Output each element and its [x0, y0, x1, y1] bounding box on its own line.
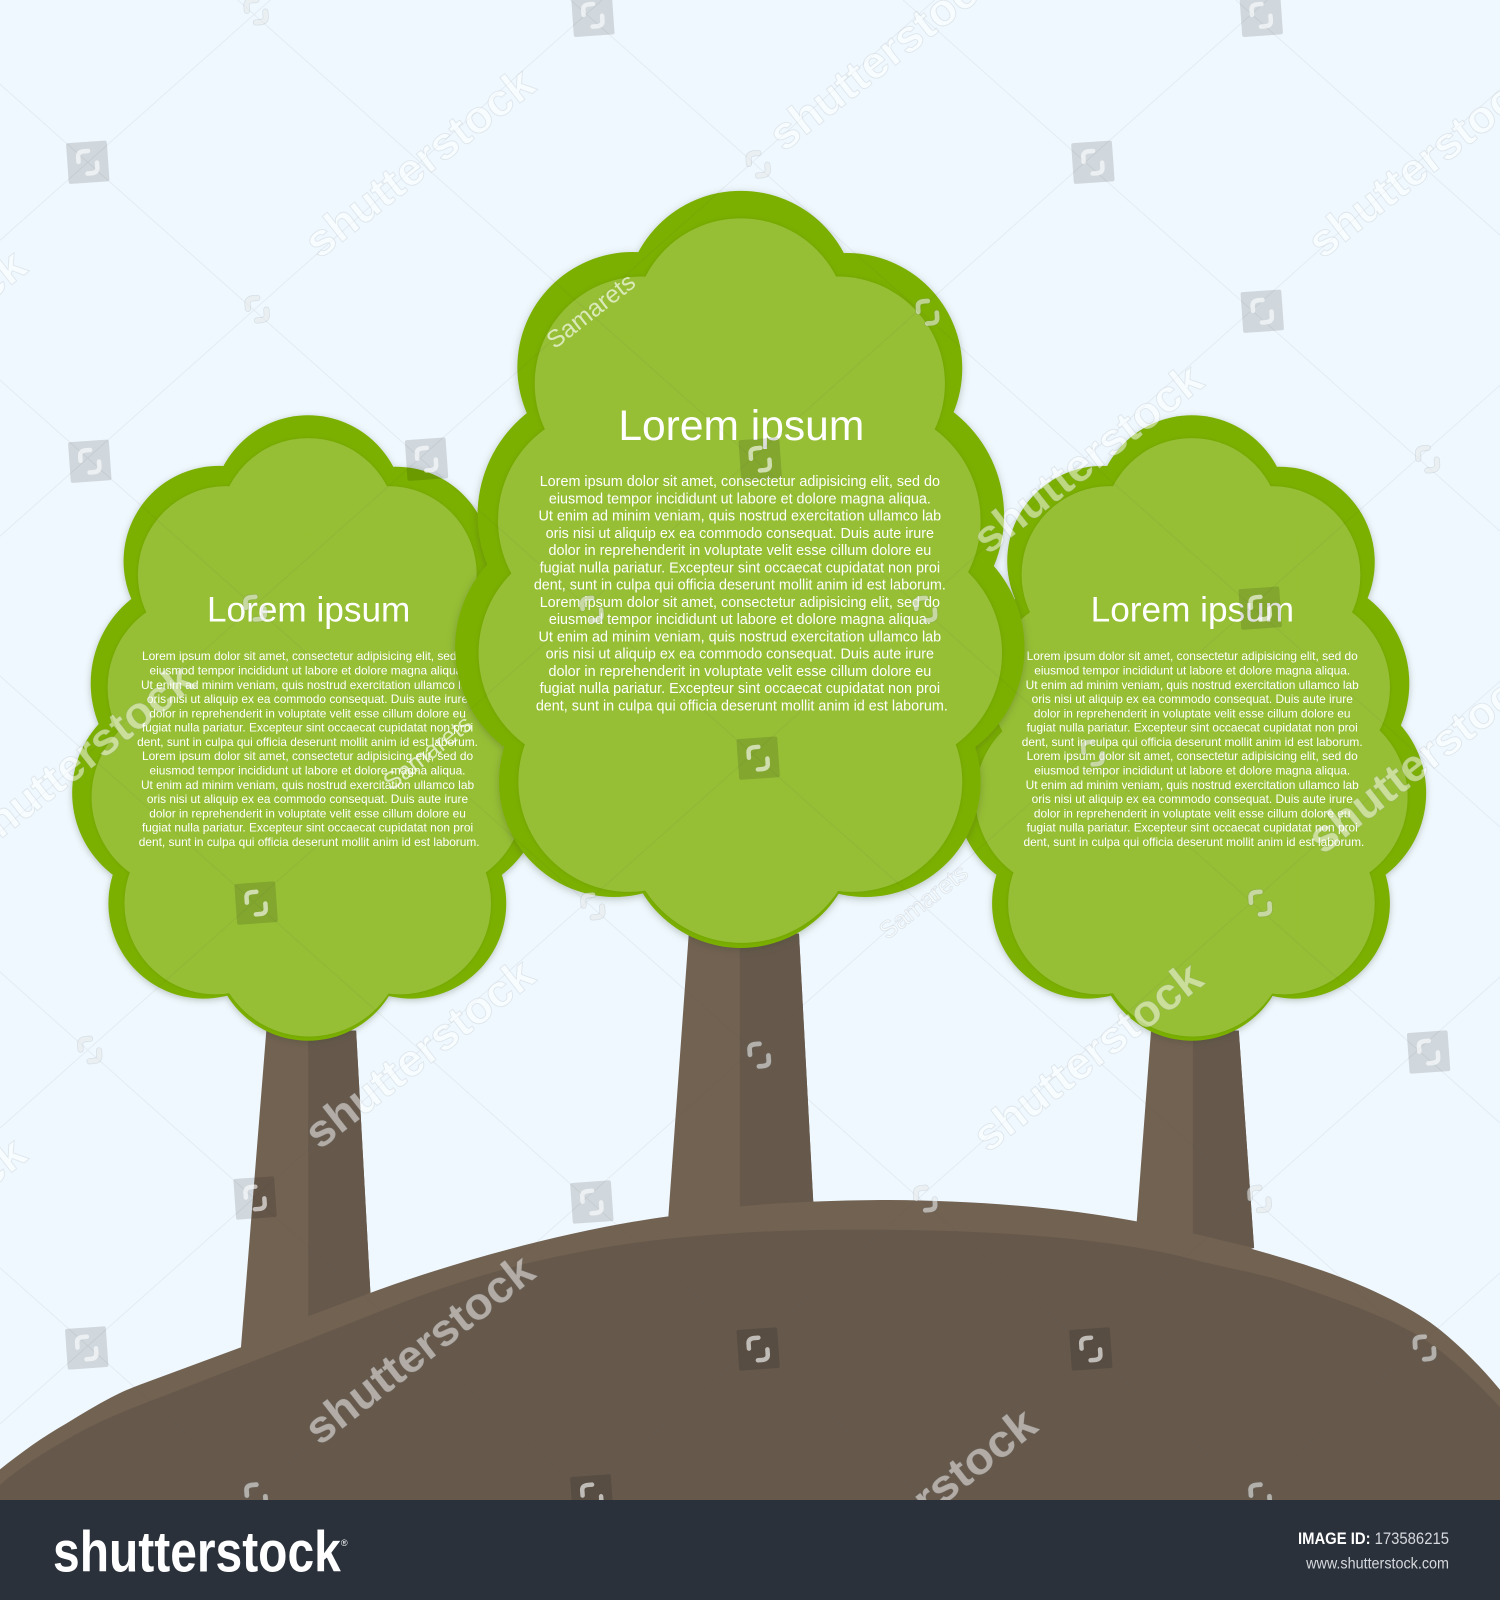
- left tree body text: oris nisi ut aliquip ex ea commodo consequat. Duis aute irure: [147, 792, 469, 806]
- footer registered mark: ®: [341, 1538, 348, 1548]
- right tree body text: dolor in reprehenderit in voluptate velit esse cillum dolore eu: [1034, 706, 1351, 720]
- right tree body text: Lorem ipsum dolor sit amet, consectetur adipisicing elit, sed do: [1027, 649, 1358, 663]
- centre tree body text: Ut enim ad minim veniam, quis nostrud exercitation ullamco lab: [538, 629, 941, 645]
- centre tree trunk: [668, 934, 813, 1224]
- right tree trunk: [1137, 1031, 1254, 1265]
- footer url: www.shutterstock.com: [1305, 1555, 1449, 1572]
- left tree body text: dent, sunt in culpa qui officia deserunt mollit anim id est laborum.: [139, 835, 480, 849]
- footer image id: IMAGE ID: 173586215: [1298, 1530, 1449, 1548]
- watermark: Samarets credit text: Samarets: [874, 859, 974, 945]
- right tree body text: dent, sunt in culpa qui officia deserunt mollit anim id est laborum.: [1023, 835, 1364, 849]
- centre tree body text: dent, sunt in culpa qui officia deserunt mollit anim id est laborum.: [534, 578, 946, 594]
- left tree body text: dolor in reprehenderit in voluptate velit esse cillum dolore eu: [149, 706, 466, 720]
- right tree crown: [956, 415, 1426, 1041]
- left tree body text: oris nisi ut aliquip ex ea commodo consequat. Duis aute irure: [147, 692, 469, 706]
- left tree body text: fugiat nulla pariatur. Excepteur sint occaecat cupidatat non proi: [142, 821, 473, 835]
- footer logo: shutterstock: [53, 1520, 341, 1584]
- left tree body text: Lorem ipsum dolor sit amet, consectetur adipisicing elit, sed do: [142, 649, 473, 663]
- right tree body text: oris nisi ut aliquip ex ea commodo consequat. Duis aute irure: [1032, 792, 1353, 806]
- centre tree body text: oris nisi ut aliquip ex ea commodo consequat. Duis aute irure: [546, 647, 934, 663]
- watermark: diagonal shutterstock text: rstock: [902, 1397, 1046, 1525]
- centre tree body text: dolor in reprehenderit in voluptate velit esse cillum dolore eu: [548, 664, 931, 680]
- left tree crown: [72, 415, 542, 1041]
- left tree trunk: [241, 1031, 370, 1349]
- centre tree body text: fugiat nulla pariatur. Excepteur sint occaecat cupidatat non proi: [540, 681, 940, 697]
- watermark: diagonal shutterstock text: shutterstock: [294, 57, 544, 267]
- right tree body text: Ut enim ad minim veniam, quis nostrud exercitation ullamco lab: [1026, 678, 1359, 692]
- centre tree heading: Lorem ipsum: [618, 402, 864, 450]
- centre tree body text: dolor in reprehenderit in voluptate velit esse cillum dolore eu: [548, 543, 931, 559]
- right tree heading: Lorem ipsum: [1091, 590, 1294, 629]
- centre tree body text: oris nisi ut aliquip ex ea commodo consequat. Duis aute irure: [546, 526, 934, 542]
- footer bar: [0, 1500, 1500, 1600]
- hill: [0, 1200, 1500, 1500]
- right tree body text: Ut enim ad minim veniam, quis nostrud exercitation ullamco lab: [1026, 778, 1359, 792]
- watermark: Samarets credit text: Samarets: [378, 710, 478, 796]
- left tree body text: Lorem ipsum dolor sit amet, consectetur adipisicing elit, sed do: [142, 749, 473, 763]
- right tree body text: fugiat nulla pariatur. Excepteur sint occaecat cupidatat non proi: [1027, 721, 1358, 735]
- watermark: diagonal shutterstock text: shutterstock: [294, 948, 544, 1158]
- right tree body text: eiusmod tempor incididunt ut labore et dolore magna aliqua.: [1034, 763, 1350, 777]
- centre tree body text: eiusmod tempor incididunt ut labore et dolore magna aliqua.: [549, 612, 931, 628]
- right tree body text: Lorem ipsum dolor sit amet, consectetur adipisicing elit, sed do: [1027, 749, 1358, 763]
- left tree body text: eiusmod tempor incididunt ut labore et dolore magna aliqua.: [150, 663, 466, 677]
- centre tree: [455, 191, 1024, 1224]
- centre tree crown: [455, 191, 1024, 948]
- left tree body text: Ut enim ad minim veniam, quis nostrud exercitation ullamco lab: [141, 678, 474, 692]
- watermark: diagonal shutterstock text: shutterstock: [294, 1244, 544, 1454]
- left tree body text: Ut enim ad minim veniam, quis nostrud exercitation ullamco lab: [141, 778, 474, 792]
- right tree: [956, 415, 1426, 1265]
- right tree body text: eiusmod tempor incididunt ut labore et dolore magna aliqua.: [1034, 663, 1350, 677]
- watermark: Samarets credit text: Samarets: [542, 269, 641, 354]
- left tree body text: dent, sunt in culpa qui officia deserunt mollit anim id est laborum.: [137, 735, 478, 749]
- left tree heading: Lorem ipsum: [207, 590, 410, 629]
- left tree body text: fugiat nulla pariatur. Excepteur sint occaecat cupidatat non proi: [142, 721, 473, 735]
- left tree: [72, 415, 542, 1349]
- centre tree body text: Lorem ipsum dolor sit amet, consectetur adipisicing elit, sed do: [540, 474, 940, 490]
- right tree body text: dent, sunt in culpa qui officia deserunt mollit anim id est laborum.: [1022, 735, 1363, 749]
- centre tree body text: fugiat nulla pariatur. Excepteur sint occaecat cupidatat non proi: [540, 560, 940, 576]
- right tree body text: fugiat nulla pariatur. Excepteur sint occaecat cupidatat non proi: [1027, 821, 1358, 835]
- watermark: diagonal shutterstock text: shutterstock: [963, 951, 1212, 1161]
- left tree body text: eiusmod tempor incididunt ut labore et dolore magna aliqua.: [150, 763, 466, 777]
- centre tree body text: dent, sunt in culpa qui officia deserunt mollit anim id est laborum.: [536, 698, 948, 714]
- watermark: diagonal shutterstock text: shutterstock: [963, 353, 1212, 563]
- watermark: Samarets credit text: [378, 269, 974, 945]
- right tree body text: dolor in reprehenderit in voluptate velit esse cillum dolore eu: [1034, 806, 1351, 820]
- left tree body text: dolor in reprehenderit in voluptate velit esse cillum dolore eu: [149, 806, 466, 820]
- centre tree body text: Lorem ipsum dolor sit amet, consectetur adipisicing elit, sed do: [540, 595, 940, 611]
- centre tree body text: eiusmod tempor incididunt ut labore et dolore magna aliqua.: [549, 491, 931, 507]
- centre tree body text: Ut enim ad minim veniam, quis nostrud exercitation ullamco lab: [538, 509, 941, 525]
- right tree body text: oris nisi ut aliquip ex ea commodo consequat. Duis aute irure: [1032, 692, 1353, 706]
